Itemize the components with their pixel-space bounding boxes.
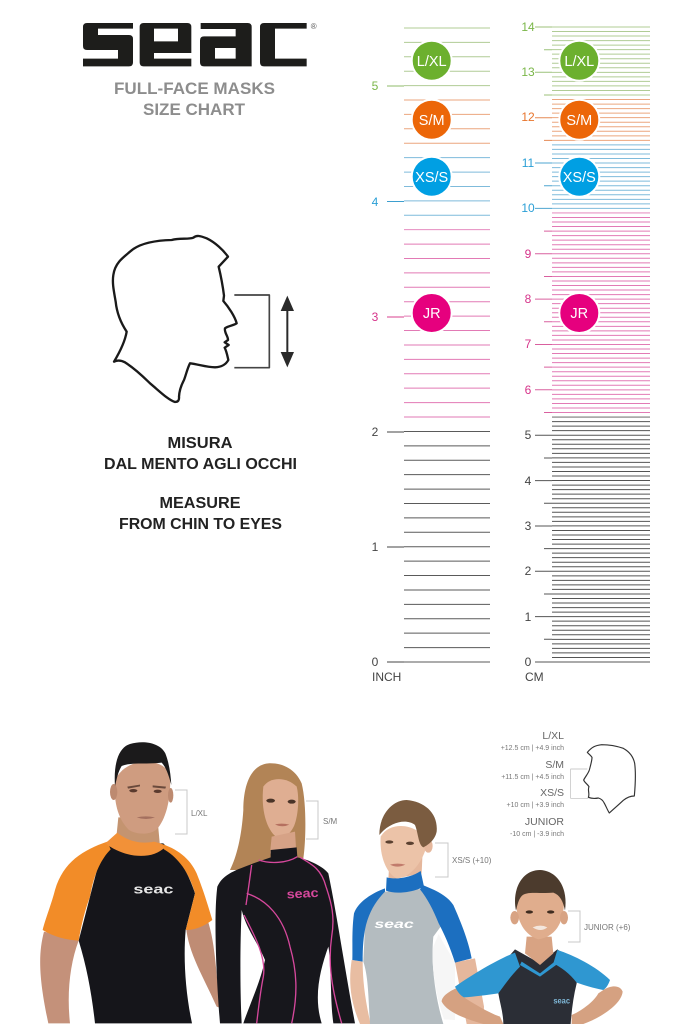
logo: SEAC: ®: [311, 22, 317, 31]
chart: centimetre ruler: 10: [521, 201, 535, 215]
chart: centimetre ruler: 5: [525, 428, 532, 442]
size labels: brackets on photos: L/XL: [191, 809, 208, 818]
badges: inch size markers: [412, 41, 452, 333]
chart: inch ruler: 4: [372, 195, 379, 209]
title: full-face masks size chart: SIZE CHART: [143, 100, 246, 119]
size labels: brackets on photos: XS/S (+10): [452, 856, 492, 865]
chart: inch ruler: 3: [372, 310, 379, 324]
badges: inch size markers: JR: [423, 306, 441, 322]
chart: centimetre ruler: 14: [521, 20, 535, 34]
badges: inch size markers: XS/S: [415, 170, 448, 186]
title: full-face masks size chart: FULL-FACE MASKS: [114, 79, 275, 98]
chart: centimetre ruler: 9: [525, 247, 532, 261]
badges: inch size markers: L/XL: [417, 54, 447, 70]
badges: inch size markers: S/M: [419, 113, 445, 129]
chart: centimetre ruler: [521, 20, 601, 684]
photo: woman in black rash guard: [216, 763, 355, 1023]
badges: centimetre size markers: L/XL: [564, 54, 594, 70]
text block: measure instructions: FROM CHIN TO EYES: [119, 516, 282, 533]
chart: inch ruler: INCH: [372, 670, 401, 684]
legend: size offsets: -10 cm | -3.9 inch: [510, 831, 564, 838]
badges: centimetre size markers: XS/S: [563, 170, 596, 186]
chart: centimetre ruler: 7: [525, 337, 532, 351]
chart: centimetre ruler: 11: [522, 156, 535, 170]
photo: man in orange rash guard: seac: [133, 881, 174, 896]
legend: size offsets: L/XL: [542, 730, 564, 742]
photo: child in blue and black suit: [442, 870, 623, 1024]
chart: centimetre ruler: 1: [525, 610, 532, 624]
size labels: brackets on photos: S/M: [323, 817, 338, 826]
chart: inch ruler: 5: [372, 79, 379, 93]
chart: centimetre ruler: 12: [521, 110, 535, 124]
photo: boy in blue and grey rash guard: seac: [374, 917, 414, 931]
size labels: brackets on photos: [175, 790, 631, 942]
chart: centimetre ruler: 8: [525, 292, 532, 306]
chart: inch ruler: 2: [372, 425, 379, 439]
icon: head profile with measure bracket: [113, 236, 294, 402]
photo: child in blue and black suit: seac: [553, 996, 571, 1005]
badges: centimetre size markers: JR: [570, 306, 588, 322]
chart: inch ruler: 1: [372, 540, 379, 554]
chart: centimetre ruler: 0: [525, 655, 532, 669]
logo: SEAC: [83, 22, 317, 66]
text block: measure instructions: MEASURE: [160, 495, 241, 512]
legend: size offsets: S/M: [545, 759, 564, 771]
chart: inch ruler: 0: [372, 655, 379, 669]
text block: measure instructions: DAL MENTO AGLI OCCHI: [104, 456, 297, 473]
badges: centimetre size markers: [559, 41, 599, 333]
legend: size offsets: +12.5 cm | +4.9 inch: [501, 745, 564, 752]
photo: woman in black rash guard: seac: [286, 886, 319, 901]
legend: size offsets: +11.5 cm | +4.5 inch: [501, 774, 564, 781]
legend: size offsets: +10 cm | +3.9 inch: [507, 802, 564, 809]
badges: centimetre size markers: S/M: [566, 113, 592, 129]
legend: size offsets: [501, 730, 564, 838]
chart: centimetre ruler: 6: [525, 383, 532, 397]
title: full-face masks size chart: [114, 79, 275, 119]
chart: centimetre ruler: 4: [525, 474, 532, 488]
legend: size offsets: XS/S: [540, 787, 564, 799]
chart: centimetre ruler: 3: [525, 519, 532, 533]
photo: boy in blue and grey rash guard: [350, 800, 484, 1024]
text block: measure instructions: MISURA: [168, 435, 233, 452]
chart: inch ruler: [372, 27, 447, 684]
chart: centimetre ruler: 2: [525, 564, 532, 578]
chart: centimetre ruler: 13: [521, 65, 535, 79]
text block: measure instructions: [104, 435, 297, 533]
legend: size offsets: JUNIOR: [525, 816, 564, 828]
icon: small head profile: [571, 745, 635, 813]
chart: centimetre ruler: CM: [525, 670, 544, 684]
photo: man in orange rash guard: [40, 742, 222, 1023]
size labels: brackets on photos: JUNIOR (+6): [584, 923, 631, 932]
